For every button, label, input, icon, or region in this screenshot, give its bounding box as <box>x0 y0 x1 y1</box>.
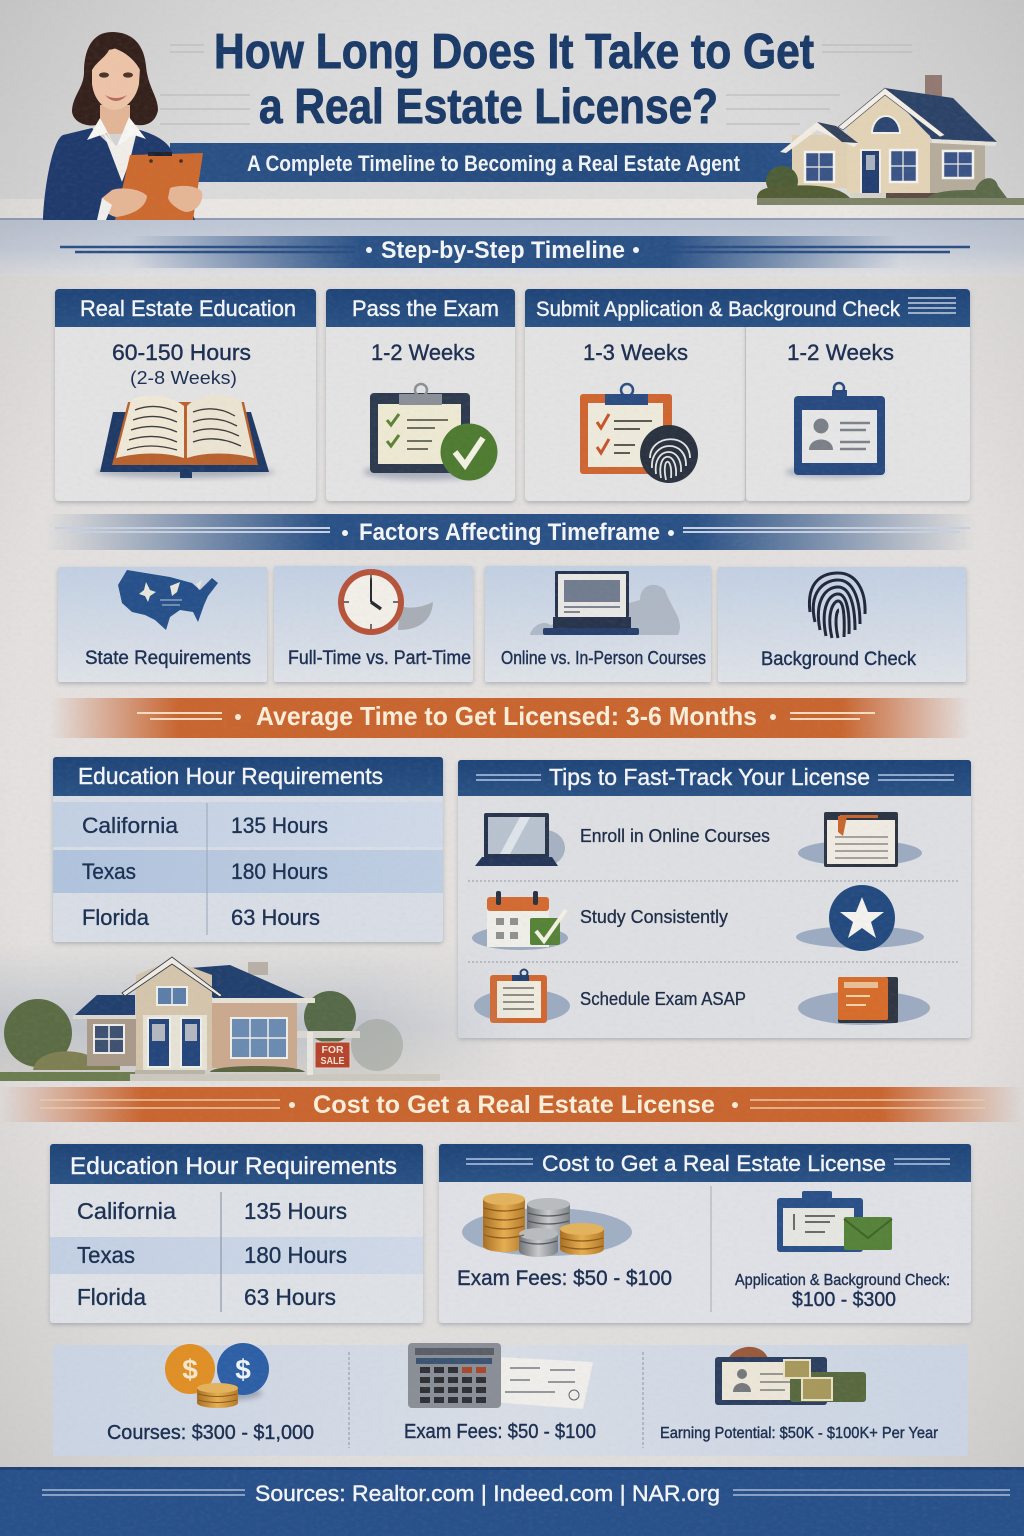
illustration: house with for sale sign <box>0 956 505 1081</box>
icon: dollar coins: $ <box>235 1354 251 1385</box>
panel: step 1 real estate education: Real Estate Education <box>80 296 296 321</box>
icon: laptop with cloud <box>530 571 680 635</box>
panel: education hour requirements table 2: California <box>77 1198 176 1224</box>
footer: sources <box>0 1467 1024 1536</box>
banner: average time to get licensed <box>50 698 970 738</box>
panel: cost to get a license: Application & Background Check: <box>735 1272 950 1289</box>
icon: clipboard with check badge <box>363 384 498 480</box>
panel: education hour requirements table 1: 63 Hours <box>231 905 320 930</box>
section banner: Step-by-Step Timeline: Step-by-Step Timeline <box>381 237 625 264</box>
panel: education hour requirements table 2: Texas <box>77 1242 135 1268</box>
panel: cost to get a license: Exam Fees: $50 - $100 <box>457 1267 672 1290</box>
panel: cost to get a license: Cost to Get a Real Estate License <box>542 1151 886 1176</box>
panel: step 3 submit application: 1-3 Weeks <box>583 340 688 365</box>
panel: step 3 submit application: Submit Application & Background Check <box>536 298 900 321</box>
panel: education hour requirements table 2: Education Hour Requirements <box>70 1153 397 1180</box>
panel: factor full-time vs part-time: Full-Time vs. Part-Time <box>288 648 471 669</box>
tip row: online courses <box>475 812 922 867</box>
icon: calculator and paper <box>408 1343 593 1409</box>
icon: US map <box>118 570 218 630</box>
panel: cost summary strip <box>53 1343 968 1456</box>
header title: How Long Does It Take to Get <box>214 25 814 79</box>
panel: step 2 pass the exam <box>326 289 515 501</box>
icon: earnings tablet and cash <box>715 1347 866 1405</box>
panel: step 1 real estate education: (2-8 Weeks) <box>130 368 237 388</box>
panel: cost summary strip: Courses: $300 - $1,000 <box>107 1422 314 1444</box>
banner: cost to get a real estate license <box>0 1087 1024 1122</box>
panel: education hour requirements table 1: Florida <box>82 905 150 930</box>
panel: factor background check: Background Check <box>761 649 916 670</box>
illustration: header house <box>757 75 1024 205</box>
tip row: online courses: Enroll in Online Courses <box>580 826 770 846</box>
panel: tips to fast-track <box>458 760 971 1038</box>
panel: step 3 submit application: 1-2 Weeks <box>787 340 894 365</box>
icon: dollar coins <box>165 1343 269 1408</box>
panel: step 3 submit application <box>525 289 970 501</box>
panel: tips to fast-track: Tips to Fast-Track Your License <box>549 764 870 790</box>
panel: education hour requirements table 2: Florida <box>77 1284 146 1310</box>
panel: factor background check <box>718 567 966 682</box>
icon: wall clock <box>338 569 433 635</box>
panel: step 1 real estate education: 60-150 Hours <box>112 340 251 365</box>
panel: education hour requirements table 2 <box>50 1144 423 1323</box>
tip row: schedule exam <box>474 970 930 1025</box>
panel: education hour requirements table 1: 135 Hours <box>231 813 328 838</box>
panel: step 2 pass the exam: Pass the Exam <box>352 296 499 321</box>
banner: average time to get licensed: Average Time to Get Licensed: 3-6 Months <box>256 701 757 731</box>
panel: education hour requirements table 2: 135 Hours <box>244 1198 347 1224</box>
sign: for sale <box>297 1031 360 1075</box>
tip row: study consistently: Study Consistently <box>580 907 728 927</box>
section banner: Step-by-Step Timeline <box>60 236 970 268</box>
panel: factor online vs in-person: Online vs. In-Person Courses <box>501 648 706 668</box>
header title <box>214 25 814 134</box>
panel: education hour requirements table 1: California <box>82 813 179 838</box>
icon: dollar coins: $ <box>182 1354 198 1385</box>
icon: ID badge <box>785 383 885 478</box>
icon: coin stacks <box>462 1193 632 1257</box>
panel: factor online vs in-person <box>485 566 711 682</box>
section banner: Factors Affecting Timeframe <box>45 514 975 550</box>
panel: education hour requirements table 1: Texas <box>82 859 136 884</box>
sign: for sale: SALE <box>320 1056 345 1067</box>
icon: application with envelope <box>777 1191 892 1252</box>
panel: step 1 real estate education <box>55 289 316 501</box>
panel: education hour requirements table 1: 180 Hours <box>231 859 328 884</box>
panel: cost to get a license: $100 - $300 <box>792 1289 896 1311</box>
panel: education hour requirements table 1 <box>53 757 443 942</box>
icon: open book <box>95 395 275 478</box>
footer: sources: Sources: Realtor.com | Indeed.com | NAR.org <box>255 1481 720 1506</box>
icon: fingerprint <box>809 573 865 638</box>
panel: factor full-time vs part-time <box>274 566 473 682</box>
subtitle ribbon: A Complete Timeline to Becoming a Real Estate Agent <box>247 151 741 176</box>
panel: cost to get a license <box>439 1144 971 1323</box>
panel: factor state requirements <box>58 567 267 682</box>
subtitle ribbon <box>170 143 792 182</box>
panel: education hour requirements table 1: Education Hour Requirements <box>78 763 383 789</box>
sign: for sale: FOR <box>322 1045 344 1056</box>
panel: factor state requirements: State Requirements <box>85 648 251 669</box>
tip row: schedule exam: Schedule Exam ASAP <box>580 989 746 1009</box>
panel: cost summary strip: Earning Potential: $50K - $100K+ Per Year <box>660 1425 938 1442</box>
icon: clipboard with fingerprint <box>580 384 698 483</box>
header title: a Real Estate License? <box>259 80 718 134</box>
panel: step 2 pass the exam: 1-2 Weeks <box>371 340 475 365</box>
illustration: agent woman with clipboard <box>43 32 203 220</box>
panel: education hour requirements table 2: 180 Hours <box>244 1242 347 1268</box>
banner: cost to get a real estate license: Cost to Get a Real Estate License <box>313 1091 715 1119</box>
section banner: Factors Affecting Timeframe: Factors Affecting Timeframe <box>359 519 660 546</box>
tip row: study consistently <box>472 885 924 951</box>
panel: education hour requirements table 2: 63 Hours <box>244 1284 336 1310</box>
panel: cost summary strip: Exam Fees: $50 - $100 <box>404 1421 596 1443</box>
